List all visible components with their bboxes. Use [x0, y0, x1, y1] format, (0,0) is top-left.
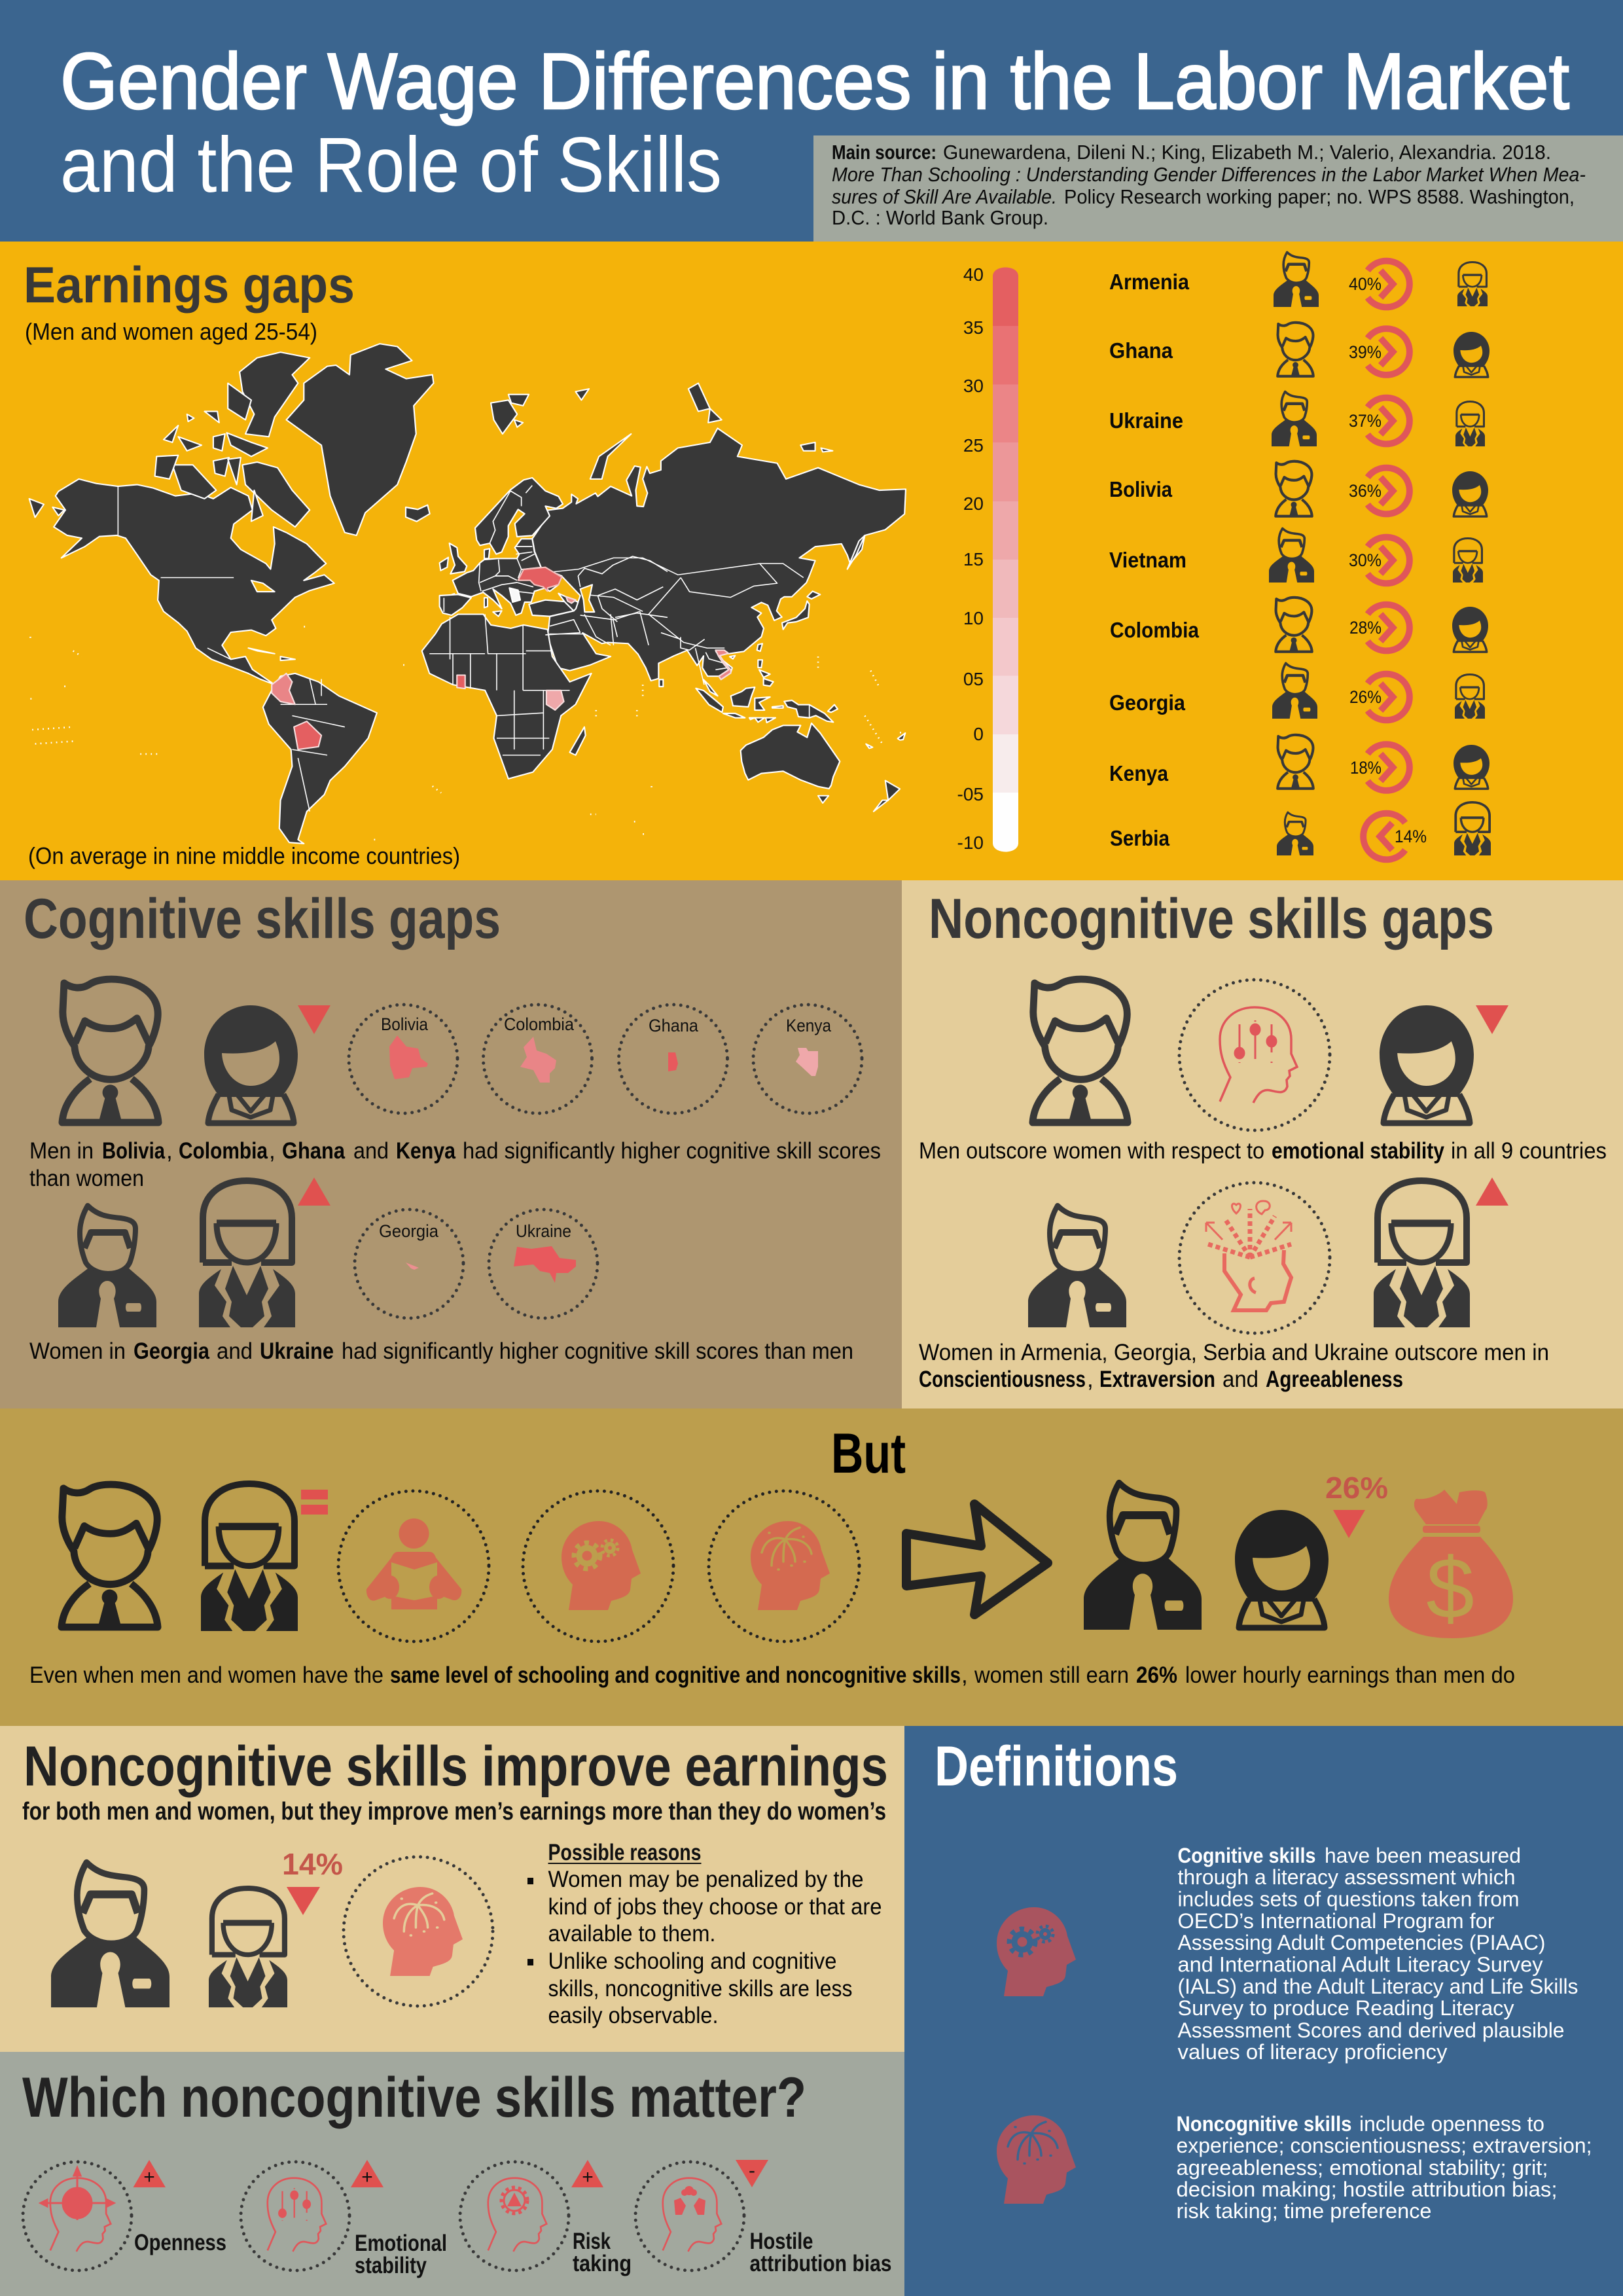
text: men scored higher: Men in	[29, 1138, 94, 1164]
icon: man outline	[62, 1484, 158, 1627]
colour scale bar: 15	[963, 549, 984, 569]
text: possible reasons: available to them.	[548, 1921, 716, 1946]
colour scale bar: -05	[957, 784, 984, 804]
colour scale bar: 40	[963, 264, 984, 285]
text: women scored higher: Women in	[29, 1338, 126, 1364]
heading: cognitive skills gaps: Cognitive skills gaps	[24, 888, 501, 950]
text: emotional stability	[919, 1138, 1607, 1164]
map circle: Colombia: Colombia	[504, 1014, 575, 1034]
panel: which noncognitive skills matter	[0, 2052, 904, 2296]
source box: Gunewardena, Dileni N.; King, Elizabeth M.; Valerio, Alexandria. 2018.	[943, 141, 1551, 164]
text: noncognitive skills definition: include openness to	[1359, 2112, 1544, 2136]
panel: definitions	[904, 1726, 1623, 2296]
text: women outscore men: Women in Armenia, Georgia, Serbia and Ukraine outscore men in	[919, 1340, 1549, 1365]
text: cognitive skills definition: have been measured	[1325, 1844, 1521, 1867]
item: openness: +	[143, 2166, 155, 2188]
icon: man in suit	[51, 1863, 169, 2007]
icon: man in suit	[58, 1206, 156, 1327]
map circle: Ukraine	[489, 1210, 597, 1318]
text: possible reasons	[527, 1840, 882, 2028]
text: cognitive skills definition: (IALS) and the Adult Literacy and Life Skills	[1178, 1975, 1578, 1998]
icon: money bag	[1389, 1490, 1513, 1638]
icon: triangle up	[1476, 1177, 1508, 1206]
text: men scored higher: Colombia	[179, 1138, 268, 1164]
text: possible reasons: Possible reasons	[548, 1840, 702, 1865]
text: cognitive skills definition: includes sets of questions taken from	[1178, 1888, 1520, 1911]
row: Kenya: Kenya	[1109, 761, 1169, 785]
row: Ghana: 39%	[1349, 342, 1382, 362]
text: noncognitive skills definition: decision making; hostile attribution bias;	[1177, 2178, 1558, 2201]
text: men scored higher: ,	[166, 1138, 173, 1164]
icon: man outline	[62, 979, 158, 1122]
source box: Main source:	[832, 141, 936, 164]
text: men scored higher: than women	[29, 1166, 144, 1191]
text: women outscore men: and	[1222, 1367, 1258, 1392]
text: possible reasons: Unlike schooling and cognitive	[548, 1948, 836, 1974]
text: women outscore men: Extraversion	[1099, 1367, 1215, 1392]
item: risk taking: taking	[573, 2251, 632, 2276]
text: same level of skills: ,	[961, 1662, 968, 1688]
icon: triangle down	[298, 1005, 330, 1034]
text: women outscore men: ,	[1087, 1367, 1094, 1392]
figure: 14%: 14%	[282, 1847, 343, 1881]
text: women scored higher: Georgia	[134, 1338, 209, 1364]
text: emotional stability: Men outscore women with respect to	[919, 1138, 1264, 1164]
icon: woman dark hair	[1235, 1510, 1329, 1628]
heading: definitions: Definitions	[935, 1735, 1178, 1798]
text: noncognitive skills definition: agreeableness; emotional stability; grit;	[1177, 2156, 1548, 2179]
panel: noncognitive skills improve earnings	[0, 1726, 904, 2052]
panel: noncognitive skills gaps	[902, 880, 1623, 1408]
icon: woman bob	[209, 1888, 287, 2007]
heading: but: But	[831, 1422, 906, 1485]
item: risk taking	[460, 2160, 632, 2276]
row: Bolivia: Bolivia	[1109, 477, 1173, 501]
row: Ghana	[1109, 323, 1489, 377]
icon: woman dark hair	[1380, 1005, 1474, 1123]
text: women outscore men	[919, 1340, 1549, 1392]
row: Armenia	[1109, 252, 1488, 307]
note: nine middle income countries: (On average in nine middle income countries)	[28, 842, 460, 869]
text: same level of skills: Even when men and women have the	[29, 1662, 383, 1688]
colour scale bar: 10	[963, 608, 984, 628]
row: Kenya	[1109, 735, 1489, 791]
item: emotional stability: +	[361, 2166, 373, 2188]
row: Colombia: 28%	[1349, 618, 1382, 637]
icon: triangle down	[1476, 1005, 1508, 1034]
text: cognitive skills definition: through a literacy assessment which	[1178, 1865, 1516, 1889]
icon: equals sign	[301, 1490, 328, 1515]
icon: schooling	[338, 1491, 489, 1641]
item: risk taking: Risk	[573, 2229, 611, 2254]
text: emotional stability: emotional stability	[1272, 1138, 1444, 1164]
map circle: Kenya: Kenya	[786, 1016, 832, 1035]
source box: Policy Research working paper; no. WPS 8588. Washington,	[1064, 185, 1575, 208]
map circle: Kenya	[753, 1005, 862, 1113]
icon: cognitive head	[997, 1907, 1076, 1996]
text: same level of skills: same level of schooling and cognitive and noncognitive skills	[390, 1662, 961, 1688]
row: Georgia: 26%	[1349, 687, 1382, 707]
source box: sures of Skill Are Available.	[832, 185, 1057, 208]
text: noncognitive skills definition	[1177, 2112, 1592, 2223]
text: possible reasons: easily observable.	[548, 2003, 719, 2028]
icon: woman dark hair	[204, 1005, 298, 1123]
item: hostile attribution bias: Hostile	[750, 2229, 813, 2254]
note: age range: (Men and women aged 25-54)	[25, 318, 317, 345]
arrow	[906, 1504, 1048, 1615]
row: Bolivia: 36%	[1349, 481, 1382, 501]
map circle: Ghana	[619, 1005, 728, 1113]
row: Ukraine: 37%	[1349, 411, 1382, 431]
text: men scored higher: Kenya	[396, 1138, 455, 1164]
text: men scored higher: ,	[269, 1138, 276, 1164]
icon: woman bob	[1374, 1181, 1470, 1327]
row: Serbia: Serbia	[1110, 826, 1170, 850]
map circle: Georgia: Georgia	[379, 1221, 439, 1241]
text: cognitive skills definition: Cognitive skills	[1178, 1844, 1315, 1867]
row: Serbia	[1110, 802, 1491, 859]
row: Armenia: 40%	[1349, 274, 1382, 294]
icon: triangle down	[1333, 1510, 1365, 1538]
icon: noncognitive head	[344, 1857, 493, 2006]
map circle: Bolivia: Bolivia	[381, 1014, 429, 1034]
item: openness: Openness	[134, 2230, 226, 2255]
item: risk taking: +	[582, 2166, 594, 2188]
item: openness	[23, 2160, 226, 2270]
text: noncognitive skills definition: experience; conscientiousness; extraversion;	[1177, 2134, 1592, 2157]
title line 2: and the Role of Skills	[60, 121, 722, 209]
colour scale bar: 25	[963, 435, 984, 456]
item: emotional stability: Emotional	[355, 2231, 447, 2256]
icon: money bag: $	[1426, 1540, 1474, 1636]
row: Ukraine	[1109, 391, 1485, 446]
row: Armenia: Armenia	[1109, 270, 1190, 294]
text: cognitive skills definition	[1178, 1844, 1578, 2064]
source box: More Than Schooling : Understanding Gender Differences in the Labor Market When Mea-	[832, 163, 1586, 186]
colour scale bar	[957, 264, 1018, 853]
colour scale bar: 05	[963, 669, 984, 689]
text: women scored higher: Ukraine	[260, 1338, 334, 1364]
colour scale bar: 35	[963, 317, 984, 338]
icon: conscientiousness head	[1179, 1183, 1330, 1333]
panel: but	[0, 1408, 1623, 1726]
row: Ukraine: Ukraine	[1109, 408, 1183, 433]
icon: woman bob	[199, 1181, 295, 1327]
text: men scored higher: had significantly higher cognitive skill scores	[463, 1138, 881, 1164]
icon: man outline	[1033, 979, 1128, 1122]
icon: triangle down	[287, 1887, 320, 1915]
icon: man in suit	[1084, 1483, 1202, 1630]
item: emotional stability: stability	[355, 2253, 427, 2278]
row: Colombia	[1110, 598, 1488, 652]
icon: cognitive head	[523, 1491, 673, 1641]
text: cognitive skills definition: values of literacy proficiency	[1178, 2040, 1448, 2064]
heading: improve earnings: Noncognitive skills improve earnings	[24, 1735, 888, 1798]
text: noncognitive skills definition: risk taking; time preference	[1177, 2199, 1432, 2223]
icon: noncognitive head	[997, 2115, 1076, 2204]
text: noncognitive skills definition: Noncognitive skills	[1177, 2112, 1352, 2136]
heading: noncognitive skills gaps: Noncognitive skills gaps	[929, 888, 1494, 950]
row: Vietnam	[1109, 528, 1483, 583]
text: same level of skills: 26%	[1136, 1662, 1177, 1688]
row: Bolivia	[1109, 461, 1488, 516]
text: possible reasons: skills, noncognitive skills are less	[548, 1976, 852, 2001]
text: same level of skills: women still earn	[974, 1662, 1129, 1688]
row: Georgia: Georgia	[1109, 691, 1186, 715]
text: same level of skills	[29, 1662, 1515, 1688]
subheading: for both men and women, but they improve men’s earnings more than they do women’s	[22, 1798, 886, 1825]
text: possible reasons: kind of jobs they choose or that are	[548, 1894, 882, 1920]
text: women scored higher: had significantly higher cognitive skill scores than men	[342, 1338, 853, 1364]
colour scale bar: 30	[963, 376, 984, 396]
text: possible reasons: Women may be penalized by the	[548, 1867, 864, 1892]
icon: triangle up	[298, 1177, 330, 1206]
item: emotional stability	[241, 2160, 447, 2278]
text: men scored higher: and	[353, 1138, 389, 1164]
row: Ghana: Ghana	[1109, 338, 1173, 363]
heading: which skills matter: Which noncognitive skills matter?	[22, 2066, 806, 2129]
figure: 26%: 26%	[1325, 1471, 1388, 1505]
row: Kenya: 18%	[1350, 758, 1382, 778]
panel: earnings gaps	[0, 242, 1623, 880]
text: same level of skills: lower hourly earnings than men do	[1185, 1662, 1515, 1688]
map circle: Georgia	[355, 1210, 463, 1318]
map circle: Colombia	[483, 1005, 592, 1113]
icon: woman bob	[201, 1484, 298, 1631]
row: Colombia: Colombia	[1110, 618, 1200, 642]
icon: man in suit	[1028, 1206, 1126, 1327]
map circle: Ukraine: Ukraine	[516, 1221, 571, 1241]
colour scale bar: 0	[973, 724, 984, 744]
panel: cognitive skills gaps	[0, 880, 902, 1408]
row: Georgia	[1109, 663, 1485, 720]
text: women outscore men: Conscientiousness	[919, 1367, 1086, 1392]
country rows	[1109, 252, 1491, 859]
map circle: Ghana: Ghana	[649, 1016, 699, 1035]
text: cognitive skills definition: Assessment Scores and derived plausible	[1178, 2018, 1564, 2042]
map circle: Bolivia	[349, 1005, 457, 1113]
item: hostile attribution bias: -	[749, 2160, 755, 2181]
text: women outscore men: Agreeableness	[1266, 1367, 1403, 1392]
text: women scored higher: and	[217, 1338, 253, 1364]
text: cognitive skills definition: Assessing Adult Competencies (PIAAC)	[1178, 1931, 1546, 1954]
colour scale bar: -10	[957, 833, 984, 853]
text: men scored higher	[29, 1138, 881, 1191]
row: Vietnam: Vietnam	[1109, 548, 1186, 572]
text: men scored higher: Ghana	[282, 1138, 345, 1164]
text: men scored higher: Bolivia	[102, 1138, 165, 1164]
item: hostile attribution bias: attribution bias	[750, 2251, 891, 2276]
icon: emotional stability head	[1179, 980, 1330, 1130]
row: Serbia: 14%	[1395, 827, 1427, 846]
heading: earnings gaps: Earnings gaps	[24, 256, 355, 314]
icon: noncognitive head	[709, 1491, 859, 1641]
item: hostile attribution bias	[635, 2160, 891, 2276]
world map	[29, 344, 906, 844]
text: cognitive skills definition: OECD’s International Program for	[1178, 1909, 1495, 1933]
text: cognitive skills definition: Survey to produce Reading Literacy	[1178, 1996, 1514, 2020]
row: Vietnam: 30%	[1349, 550, 1382, 570]
text: cognitive skills definition: and International Adult Literacy Survey	[1178, 1953, 1543, 1977]
text: women scored higher	[29, 1338, 853, 1364]
text: emotional stability: in all 9 countries	[1451, 1138, 1607, 1164]
source box	[813, 135, 1623, 242]
colour scale bar: 20	[963, 493, 984, 514]
panel: header	[0, 0, 1623, 242]
source box: D.C. : World Bank Group.	[832, 206, 1048, 229]
